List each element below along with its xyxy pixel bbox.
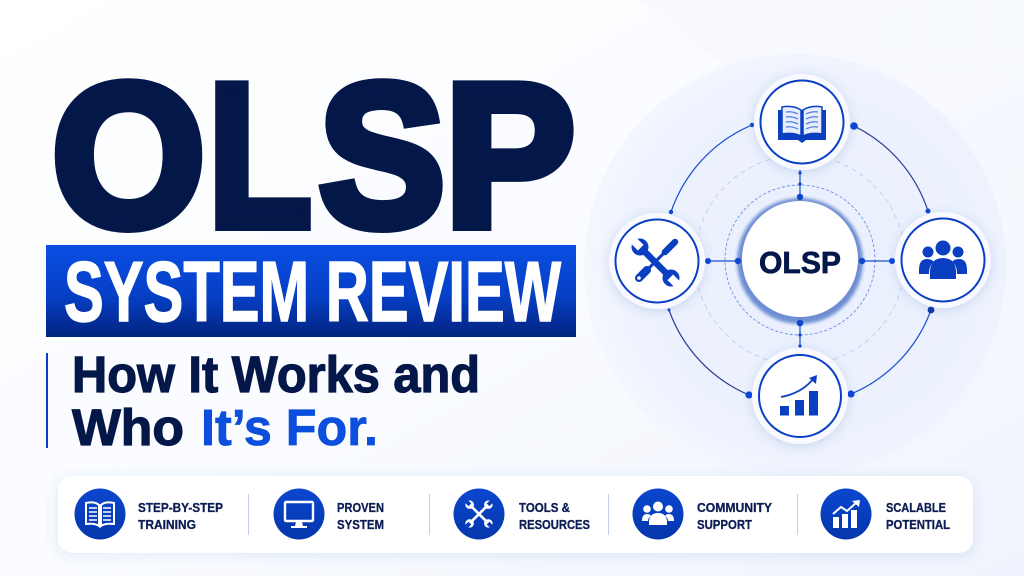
- center node: OLSP: OLSP: [759, 245, 841, 280]
- subtitle: Who: [72, 399, 184, 456]
- icon: bar chart with arrow: [780, 375, 818, 416]
- panel: feature strip: [58, 476, 973, 553]
- center node: OLSP: [737, 198, 863, 324]
- title: OLSP: P: [445, 43, 575, 269]
- banner: system review: SYSTEM REVIEW: [64, 245, 562, 340]
- title: OLSP: S: [319, 42, 445, 269]
- panel: hub diagram: [584, 54, 1006, 476]
- title: OLSP: L: [208, 42, 311, 269]
- feature: scalable potential: [820, 488, 950, 540]
- feature: proven system: SYSTEM: [337, 517, 384, 532]
- feature: tools and resources: TOOLS &: [519, 500, 570, 515]
- feature: tools and resources: RESOURCES: [519, 517, 590, 532]
- node: growth chart: [752, 348, 848, 444]
- subtitle: It’s For.: [201, 399, 378, 456]
- feature: proven system: PROVEN: [337, 500, 384, 515]
- node: book: [754, 74, 850, 170]
- title: OLSP: O: [52, 43, 205, 269]
- icon: open book: [778, 106, 826, 143]
- feature: training: TRAINING: [138, 517, 196, 532]
- feature: training: STEP-BY-STEP: [138, 500, 223, 515]
- feature: community support: [632, 488, 772, 540]
- feature: community support: SUPPORT: [697, 517, 752, 532]
- feature: training: [74, 488, 223, 540]
- feature: scalable potential: SCALABLE: [886, 500, 946, 515]
- icon: people: [919, 240, 967, 279]
- feature: tools and resources: [454, 488, 590, 540]
- feature: proven system: [274, 488, 384, 540]
- title: OLSP: [52, 42, 575, 269]
- node: community: [895, 212, 991, 308]
- feature: community support: COMMUNITY: [697, 500, 772, 515]
- feature: scalable potential: POTENTIAL: [886, 517, 950, 532]
- orbit connectors: [669, 125, 931, 395]
- subtitle: How It Works and: [72, 346, 480, 403]
- node: tools: [609, 213, 705, 309]
- subtitle: [46, 346, 480, 456]
- icon: wrench and screwdriver: [627, 234, 684, 291]
